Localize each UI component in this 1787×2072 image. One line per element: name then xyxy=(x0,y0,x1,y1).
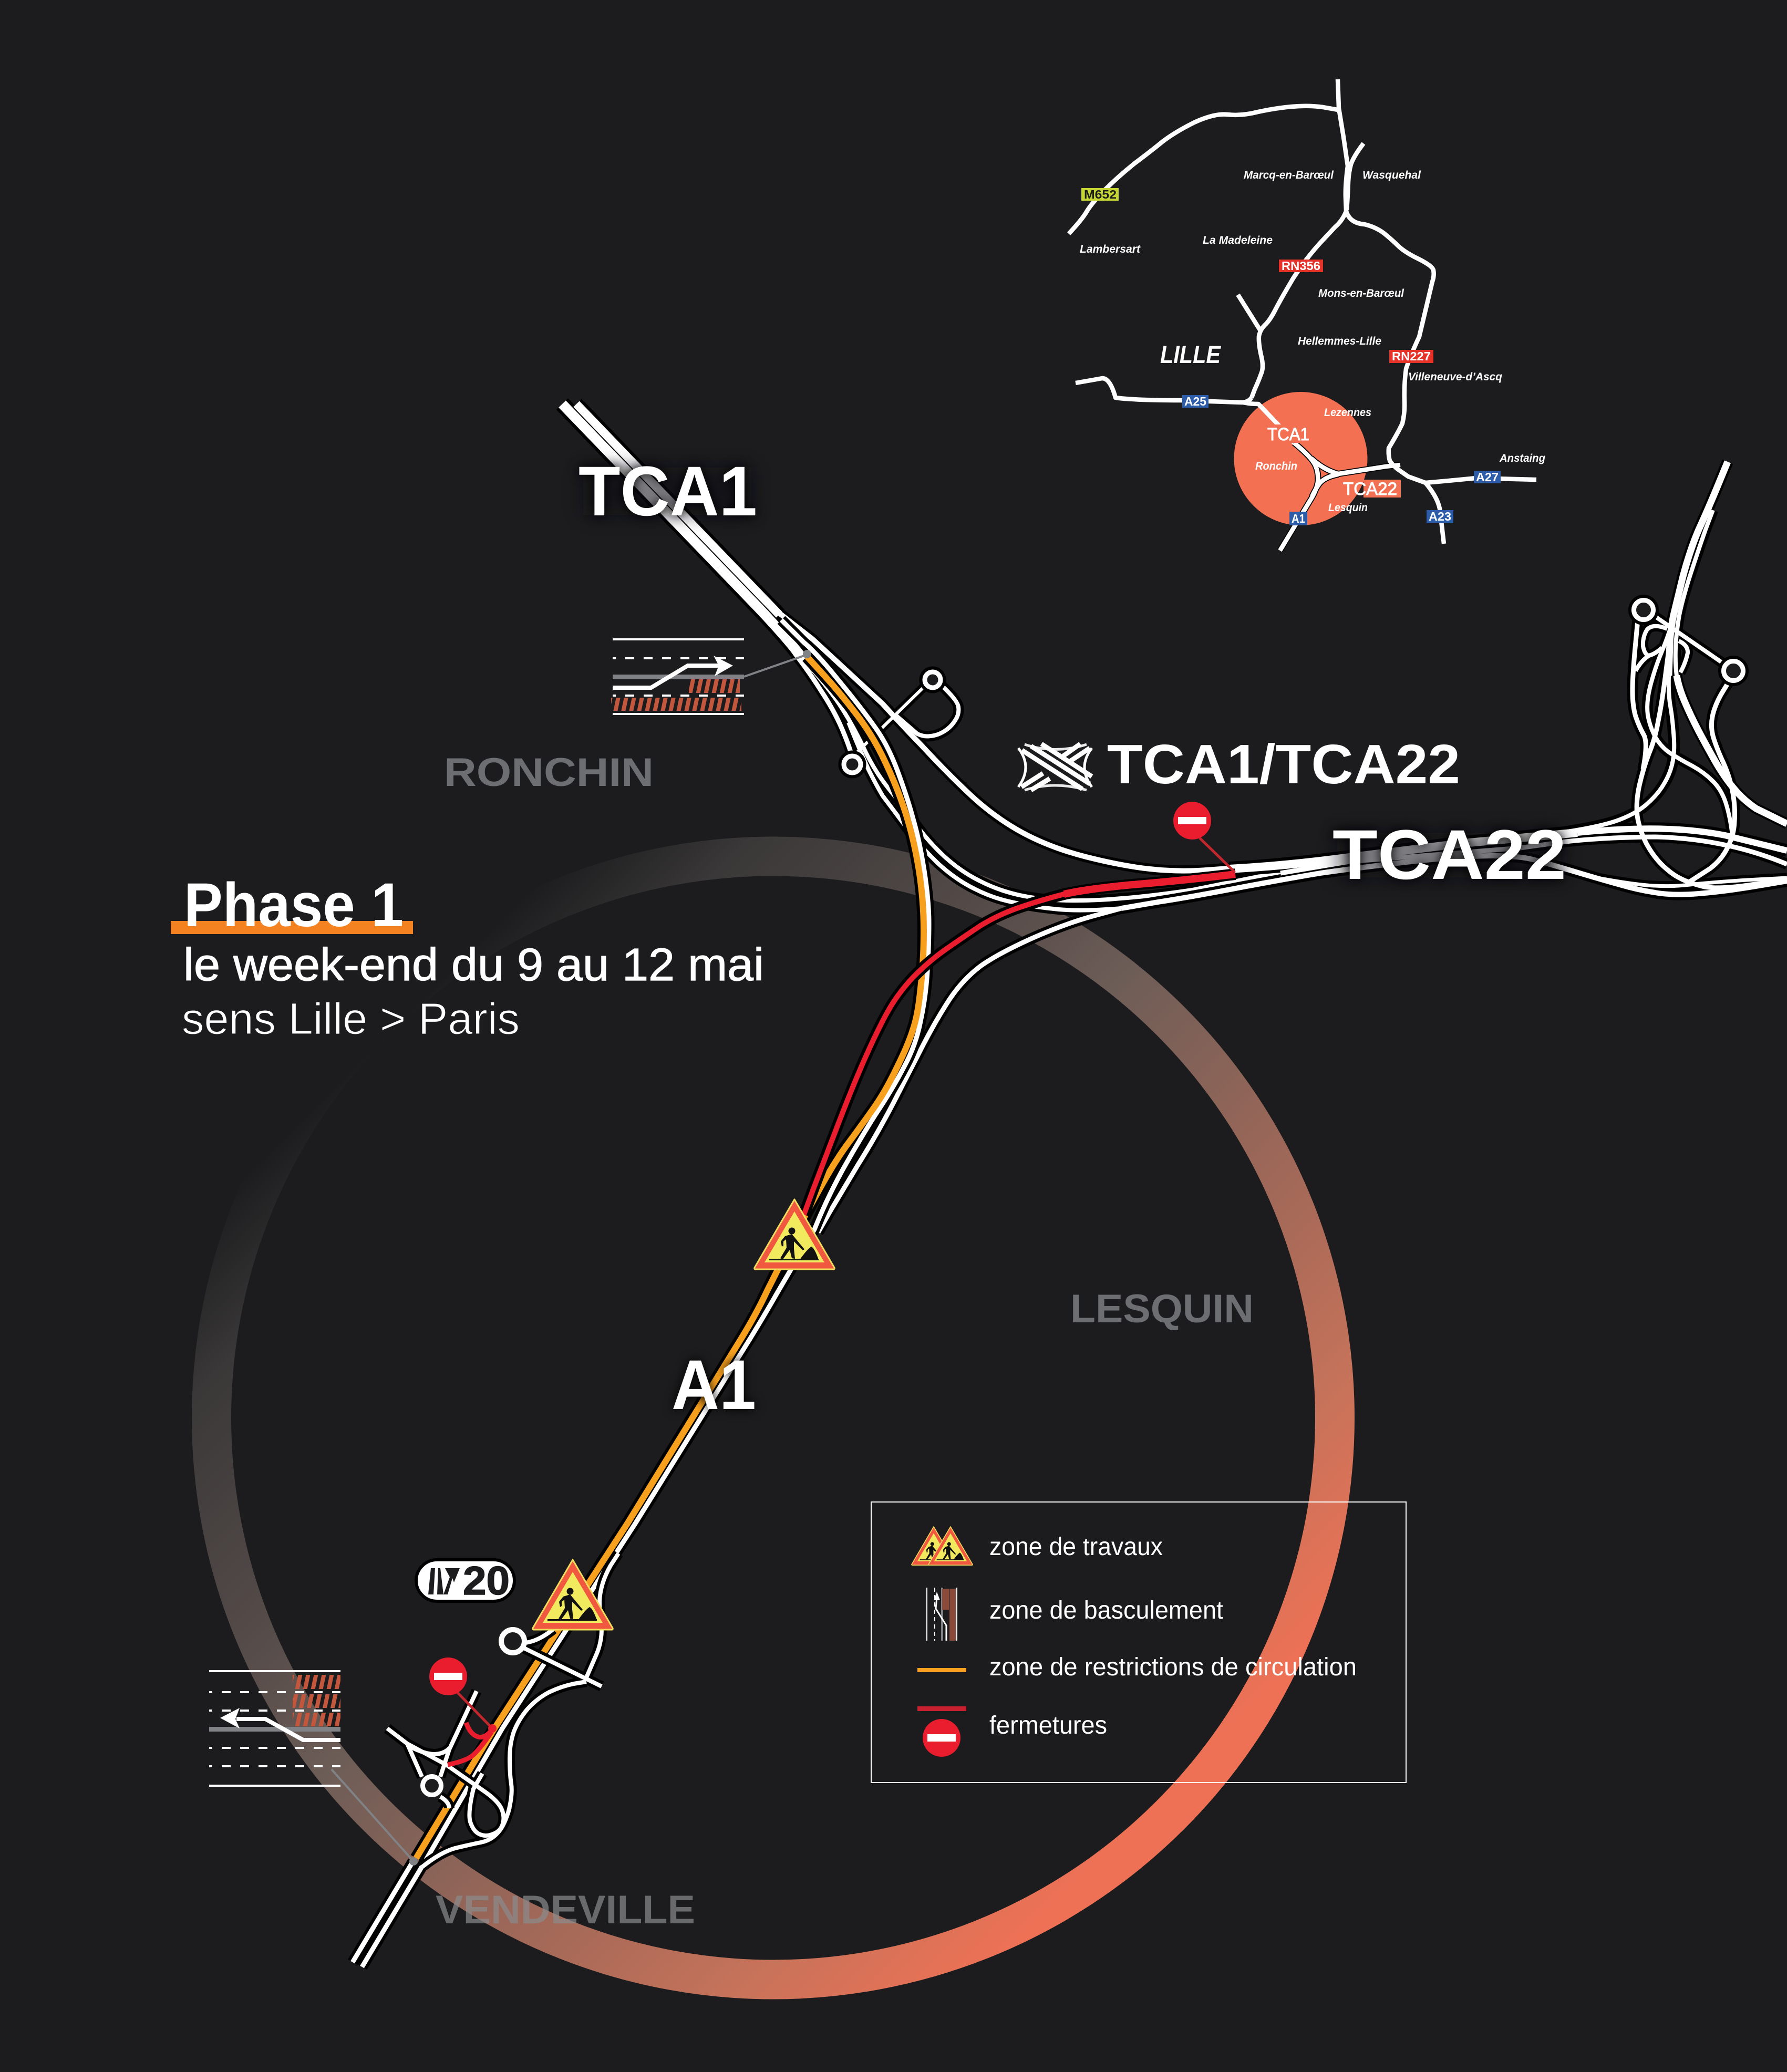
roundabout east xyxy=(1723,661,1743,681)
icon: roadworks xyxy=(912,1527,973,1565)
inset: town labels: Marcq-en-Barœul xyxy=(1244,169,1334,181)
inset badge: A1: A1 xyxy=(1292,512,1305,525)
closure sign exit 20 xyxy=(429,1657,497,1733)
inset: road casing on circle xyxy=(1280,443,1400,551)
lane diagram: south switchover xyxy=(209,1671,418,1866)
inset: town labels: Lambersart xyxy=(1080,243,1141,255)
icon: switchover xyxy=(927,1588,957,1641)
dates: le week-end du 9 au 12 mai xyxy=(183,939,764,990)
inset badge: RN356: RN356 xyxy=(1282,259,1320,273)
roadworks sign 1 xyxy=(755,1199,834,1269)
closure sign TCA22 xyxy=(1173,802,1235,872)
exit icon xyxy=(428,1568,460,1594)
icon: no entry xyxy=(923,1719,960,1757)
inset badge: RN227: RN227 xyxy=(1392,349,1431,363)
roundabout north-west xyxy=(1634,600,1653,620)
lane diagram: north switchover xyxy=(611,639,811,714)
legend text: closures: fermetures xyxy=(989,1712,1107,1739)
inset: coral highlight circle xyxy=(1234,392,1367,525)
inset: town labels: Lezennes xyxy=(1324,407,1371,419)
inset: town labels: Wasquehal xyxy=(1362,169,1421,181)
closure curves near exit 20 xyxy=(448,1723,493,1765)
inset: town labels: La Madeleine xyxy=(1203,234,1273,246)
roundabout west of TCA1, white ring xyxy=(844,756,861,773)
exit 20 badge xyxy=(416,1559,514,1603)
label: TCA22: TCA22 xyxy=(1332,816,1566,894)
inset: town labels: Ronchin xyxy=(1255,460,1297,472)
roundabout west of TCA1 xyxy=(844,756,861,773)
legend text: switchover: zone de basculement xyxy=(989,1597,1223,1624)
legend swatch: restrictions xyxy=(917,1668,966,1672)
roundabout south of exit xyxy=(422,1777,441,1795)
inset: town labels: Mons-en-Barœul xyxy=(1318,287,1404,299)
road network: A1 with restriction line xyxy=(353,620,1235,1967)
inset: TCA1 label background xyxy=(1264,424,1312,443)
inset badge: M652: M652 xyxy=(1084,188,1117,201)
inset: TCA22 label: TCA22 xyxy=(1343,479,1397,499)
legend panel xyxy=(871,1502,1406,1783)
roundabout east, white ring xyxy=(1723,661,1743,681)
road network: TCA1 and junction xyxy=(562,404,1280,1232)
roundabout east of TCA1, white ring xyxy=(925,672,941,688)
heading block: Phase 1 xyxy=(171,871,764,1043)
place label: Vendeville: VENDEVILLE xyxy=(436,1888,695,1932)
inset locator map xyxy=(1069,79,1545,551)
icon: interchange symbol xyxy=(1018,744,1092,790)
inset: TCA1 label: TCA1 xyxy=(1267,424,1309,444)
label: TCA1: TCA1 xyxy=(579,452,757,531)
inset badge: A23: A23 xyxy=(1429,510,1451,523)
legend swatch: closures xyxy=(917,1706,966,1711)
inset badge: A27: A27 xyxy=(1476,470,1499,484)
label: TCA1/TCA22: TCA1/TCA22 xyxy=(1107,733,1460,795)
direction: sens Lille > Paris xyxy=(182,994,520,1043)
exit number: 20 xyxy=(463,1559,510,1603)
inset: town labels: Hellemmes-Lille xyxy=(1298,335,1381,347)
roundabout east of TCA1 xyxy=(925,672,941,688)
inset: roads xyxy=(1069,79,1536,551)
inset: TCA22 label background xyxy=(1364,480,1401,498)
inset: town labels: Villeneuve-d’Ascq xyxy=(1408,371,1502,383)
heading text: Phase 1 xyxy=(184,871,404,940)
place label: Lesquin: LESQUIN xyxy=(1070,1287,1254,1331)
road network: exit 20 interchange xyxy=(387,1553,618,1867)
inset: town labels xyxy=(1080,169,1545,514)
roadworks sign 2 xyxy=(533,1560,613,1630)
legend text: roadworks: zone de travaux xyxy=(989,1533,1163,1561)
label: A1: A1 xyxy=(672,1346,756,1424)
inset: town labels: Lesquin xyxy=(1328,502,1368,514)
road network: TCA22 and east interchange xyxy=(1121,462,1787,908)
heading underline xyxy=(171,921,413,934)
roundabout north-west, white ring xyxy=(1634,600,1653,620)
place label: Ronchin: RONCHIN xyxy=(444,750,654,795)
inset: town labels: Anstaing xyxy=(1499,452,1545,464)
inset: city label: LILLE xyxy=(1160,340,1221,368)
inset badge: A25: A25 xyxy=(1184,395,1206,408)
roundabout north of exit xyxy=(501,1630,524,1653)
gradient ring xyxy=(211,856,1335,1980)
legend text: restrictions: zone de restrictions de circulation xyxy=(989,1653,1357,1681)
